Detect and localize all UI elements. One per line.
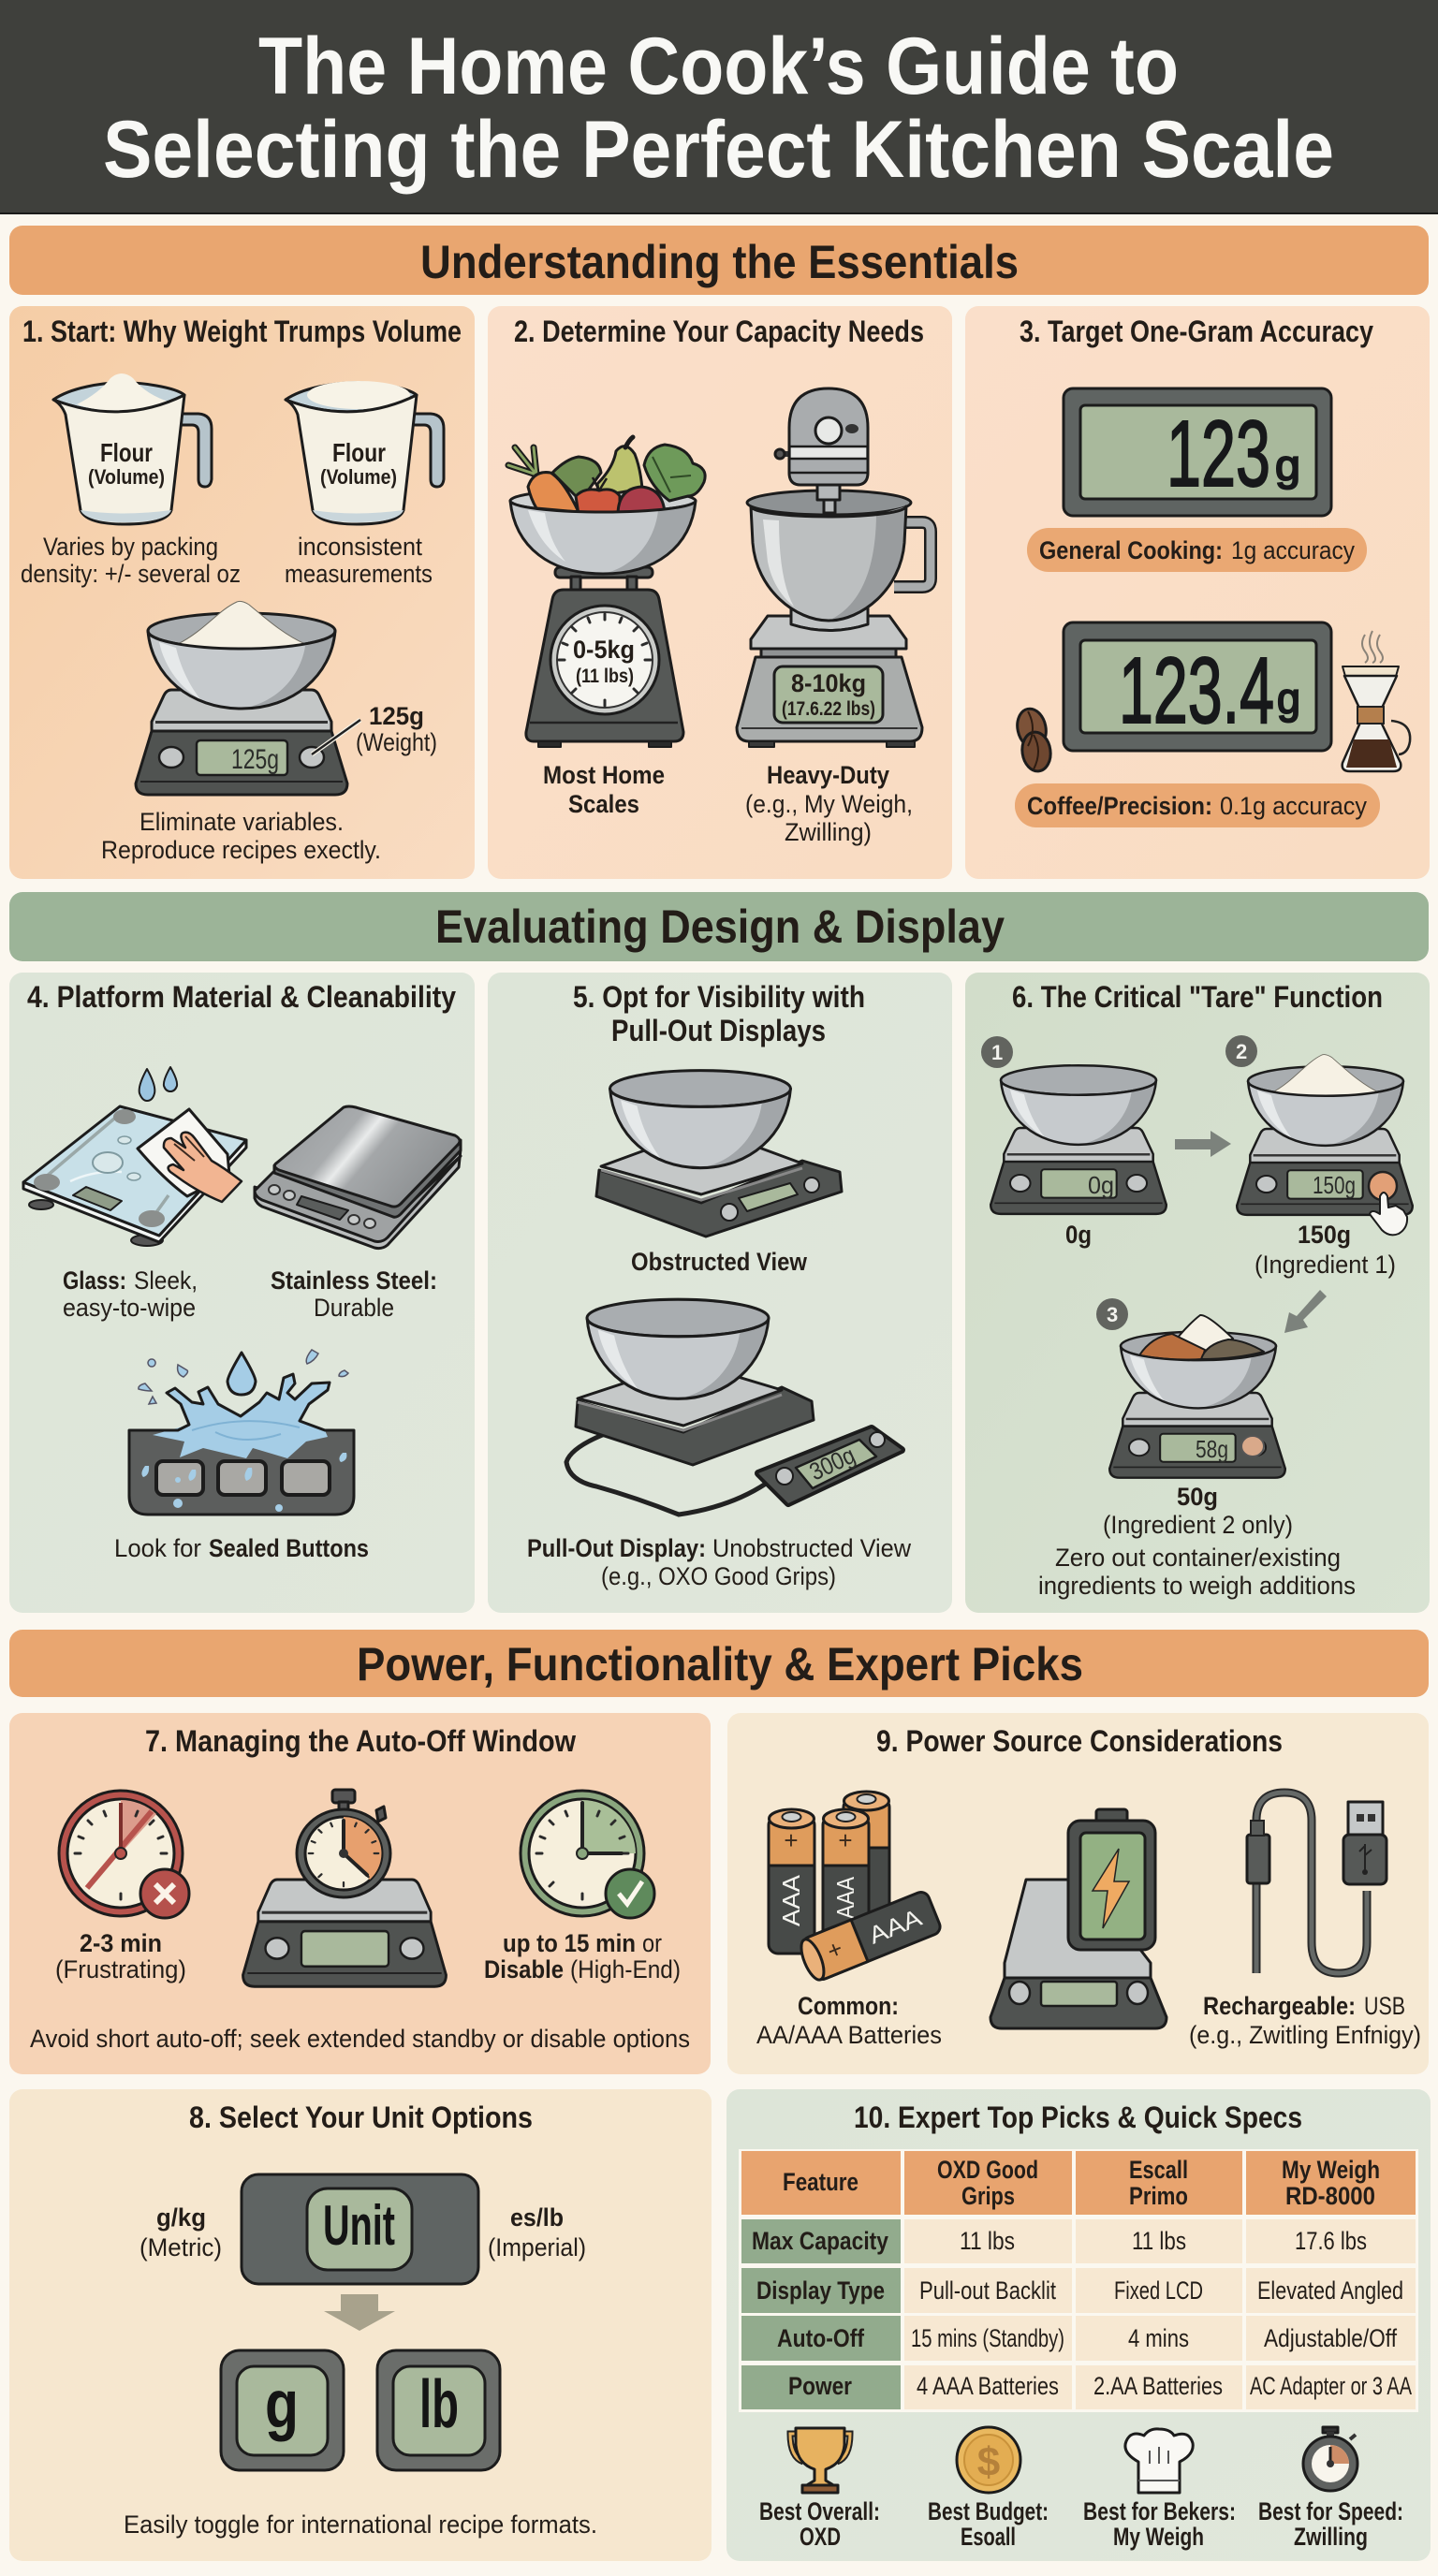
label: heavy duty xyxy=(745,761,913,846)
heading 5: 5. Opt for Visibility with xyxy=(573,980,865,1014)
icon: dial scale with vegetables: 0-5kg xyxy=(573,636,635,664)
icon: scale with pull-out display xyxy=(566,1299,902,1515)
caption: inconsistent xyxy=(285,533,433,588)
icon: measuring cup heaped: Flour xyxy=(100,438,153,467)
icon: stainless steel scale xyxy=(255,1106,461,1249)
heading 3: 3. Target One-Gram Accuracy xyxy=(1020,315,1373,348)
icon: g key: g xyxy=(265,2367,299,2442)
caption: stainless steel: Durable xyxy=(314,1294,394,1322)
icon: sealed buttons with water splash xyxy=(129,1350,354,1515)
caption: pull-out display: (e.g., OXO Good Grips) xyxy=(601,1562,836,1590)
icon: AAA batteries: + xyxy=(784,1826,799,1854)
section banner: understanding the essentials: Understanding the Essentials xyxy=(420,236,1019,288)
icon: stand mixer on heavy-duty scale xyxy=(737,388,931,747)
section banner: evaluating design and display xyxy=(9,892,1429,961)
arrow: down xyxy=(324,2294,395,2331)
title: The Home Cook’s Guide to xyxy=(258,22,1179,111)
icon: g key xyxy=(221,2350,344,2470)
panel 7: auto-off window xyxy=(9,1713,711,2074)
comparison table: Power xyxy=(788,2372,852,2400)
label: metric xyxy=(139,2203,222,2261)
caption: avoid short auto-off: Avoid short auto-off; seek extended standby or disable options xyxy=(30,2025,690,2053)
caption: packing density: density: +/- several oz xyxy=(21,560,241,588)
heading 7: 7. Managing the Auto-Off Window xyxy=(145,1724,576,1758)
icon: pour over coffee maker xyxy=(1343,631,1410,771)
heading 9: 9. Power Source Considerations xyxy=(876,1724,1283,1758)
step 2 scale: 150g xyxy=(1313,1171,1356,1199)
comparison table: Display Type xyxy=(756,2276,885,2305)
caption: inconsistent: inconsistent xyxy=(298,533,422,561)
icon: scale with pull-out display: 300g xyxy=(805,1441,859,1486)
heading 5 xyxy=(573,980,865,1047)
comparison table: 4 AAA Batteries xyxy=(917,2372,1059,2400)
comparison table: Feature xyxy=(783,2168,858,2196)
label: up to 15 min: up to 15 min xyxy=(503,1929,636,1957)
label: imperial: (Imperial) xyxy=(488,2233,586,2261)
caption: inconsistent: measurements xyxy=(285,560,433,588)
icon: AAA batteries: + xyxy=(823,1934,846,1966)
panel 4: platform material xyxy=(9,973,475,1613)
label: heavy duty: Zwilling) xyxy=(785,818,872,846)
caption: rechargeable xyxy=(1189,1992,1421,2049)
caption: best overall: OXD xyxy=(800,2523,841,2551)
caption: packing density xyxy=(21,533,241,588)
caption: eliminate variables: Eliminate variables. xyxy=(139,808,344,836)
caption: best for speed: Zwilling xyxy=(1294,2523,1368,2551)
heading 6: 6. The Critical "Tare" Function xyxy=(1012,980,1383,1014)
panel 6: tare function xyxy=(965,973,1430,1613)
label: 150g ingredient 1: 150g xyxy=(1298,1221,1351,1249)
heading 8: 8. Select Your Unit Options xyxy=(189,2100,533,2134)
caption: sealed buttons: Look for xyxy=(114,1534,201,1562)
panel 1: why weight trumps volume xyxy=(9,306,475,879)
icon: trophy xyxy=(790,2428,850,2493)
arrow: step 1 to 2 xyxy=(1175,1131,1231,1157)
step 2 scale: 2 xyxy=(1236,1040,1247,1063)
step 1 scale: 1 xyxy=(991,1041,1003,1064)
pill: general cooking: General Cooking: xyxy=(1039,536,1223,564)
caption: common batteries xyxy=(756,1992,942,2049)
caption: 50g and tare note: ingredients to weigh additions xyxy=(1038,1572,1356,1600)
caption: eliminate variables: Reproduce recipes exectly. xyxy=(101,836,381,864)
comparison table: 15 mins (Standby) xyxy=(911,2324,1064,2352)
caption: sealed buttons: Sealed Buttons xyxy=(209,1534,369,1562)
icon: AAA batteries: AAA xyxy=(831,1876,859,1919)
display: 123g xyxy=(1064,388,1331,516)
comparison table: Elevated Angled xyxy=(1257,2276,1403,2305)
caption: glass: easy-to-wipe xyxy=(63,1294,196,1322)
comparison table: Adjustable/Off xyxy=(1264,2324,1397,2352)
heading 1: 1. Start: Why Weight Trumps Volume xyxy=(22,315,462,348)
panel 9: power source xyxy=(727,1713,1429,2074)
label: up to 15 min: or xyxy=(642,1929,662,1957)
label: 2-3 min xyxy=(55,1929,186,1983)
section banner: power, functionality and expert picks xyxy=(9,1630,1429,1697)
heading 2: 2. Determine Your Capacity Needs xyxy=(514,315,924,348)
comparison table: Pull-out Backlit xyxy=(919,2276,1056,2305)
caption: best budget xyxy=(928,2497,1049,2551)
display: 123g: g xyxy=(1275,441,1300,490)
caption: best for bakers xyxy=(1083,2497,1236,2551)
label: most home scales: Most Home xyxy=(543,761,665,789)
caption: toggle: Easily toggle for international recipe formats. xyxy=(124,2510,597,2539)
panel 8: unit options xyxy=(9,2089,712,2561)
caption: best budget: Best Budget: xyxy=(928,2497,1049,2525)
caption: best for bakers: Best for Bekers: xyxy=(1083,2497,1236,2525)
comparison table: Fixed LCD xyxy=(1114,2276,1203,2305)
caption: best overall: Best Overall: xyxy=(759,2497,880,2525)
step 1 scale xyxy=(981,1036,1167,1214)
heading 4: 4. Platform Material & Cleanability xyxy=(27,980,456,1014)
panel 3: one gram accuracy xyxy=(965,306,1430,879)
label: 150g ingredient 1: (Ingredient 1) xyxy=(1255,1251,1396,1279)
comparison table: OXD Good xyxy=(937,2156,1038,2184)
icon: coin: $ xyxy=(977,2439,1000,2485)
label: 125g weight: (Weight) xyxy=(356,728,437,756)
comparison table: 11 lbs xyxy=(1132,2227,1186,2255)
label: heavy duty: (e.g., My Weigh, xyxy=(745,790,913,818)
label: 150g ingredient 1 xyxy=(1255,1221,1396,1279)
comparison table: Max Capacity xyxy=(752,2227,888,2255)
label: 125g weight xyxy=(356,702,437,756)
label: metric: g/kg xyxy=(156,2203,206,2232)
icon: chef hat xyxy=(1125,2429,1193,2493)
display: 123.4g xyxy=(1064,622,1331,751)
caption: sealed buttons xyxy=(114,1534,369,1562)
icon: extended auto-off clock xyxy=(521,1791,654,1918)
caption: stainless steel xyxy=(271,1266,437,1322)
caption: glass: Sleek, xyxy=(134,1266,198,1295)
icon: dial scale with vegetables: (11 lbs) xyxy=(576,666,634,687)
caption: best budget: Esoall xyxy=(961,2523,1016,2551)
label: up to 15 min xyxy=(484,1929,681,1983)
display: 123.4g: g xyxy=(1277,674,1300,723)
icon: stopwatch on scale xyxy=(243,1790,446,1986)
arrow: step 2 to 3 xyxy=(1284,1290,1327,1333)
caption: packing density: Varies by packing xyxy=(43,533,218,561)
section banner: evaluating design and display: Evaluating Design & Display xyxy=(435,900,1005,953)
caption: best for bakers: My Weigh xyxy=(1113,2523,1204,2551)
step 3 scale: 58g xyxy=(1196,1435,1228,1463)
icon: measuring cup level xyxy=(286,381,444,524)
icon: AAA batteries xyxy=(769,1792,943,1983)
comparison table: Escall xyxy=(1129,2156,1188,2184)
icon: measuring cup level: Flour xyxy=(332,438,386,467)
comparison table: 2.AA Batteries xyxy=(1093,2372,1223,2400)
caption: rechargeable: (e.g., Zwitling Enfnigy) xyxy=(1189,2021,1421,2049)
icon: glass scale being wiped xyxy=(23,1106,246,1246)
comparison table xyxy=(739,2149,1418,2412)
icon: lb key xyxy=(377,2350,500,2470)
caption: 50g and tare note: Zero out container/existing xyxy=(1055,1544,1341,1572)
label: 2-3 min: (Frustrating) xyxy=(55,1955,186,1983)
step 3 scale xyxy=(1096,1298,1285,1478)
pill: general cooking: 1g accuracy xyxy=(1231,536,1355,564)
label: 2-3 min: 2-3 min xyxy=(80,1929,162,1957)
caption: stainless steel: Stainless Steel: xyxy=(271,1266,437,1295)
comparison table: 4 mins xyxy=(1128,2324,1189,2352)
title banner xyxy=(0,0,1438,214)
display: 123g: 123 xyxy=(1167,402,1270,506)
label: 0g: 0g xyxy=(1065,1221,1092,1249)
caption: best for speed xyxy=(1258,2497,1403,2551)
label: imperial: es/lb xyxy=(510,2203,564,2232)
caption: common batteries: AA/AAA Batteries xyxy=(756,2021,942,2049)
label: 125g weight: 125g xyxy=(369,702,424,730)
icon: coffee beans xyxy=(1014,706,1053,773)
caption: glass xyxy=(63,1266,198,1322)
pill: coffee precision xyxy=(1015,783,1380,827)
caption: 50g and tare note xyxy=(1038,1483,1356,1600)
caption: glass: Glass: xyxy=(63,1266,126,1295)
icon: measuring cup level: (Volume) xyxy=(320,465,397,489)
label: up to 15 min: (High-End) xyxy=(570,1955,681,1983)
label: up to 15 min: Disable xyxy=(484,1955,564,1983)
section banner: power, functionality and expert picks: Power, Functionality & Expert Picks xyxy=(357,1638,1083,1690)
comparison table: RD-8000 xyxy=(1285,2182,1375,2210)
icon: timer xyxy=(1303,2427,1357,2491)
heading 10: 10. Expert Top Picks & Quick Specs xyxy=(854,2100,1302,2134)
heading 5: Pull-Out Displays xyxy=(611,1014,826,1047)
icon: scale with flour bowl xyxy=(136,601,360,795)
section banner: understanding the essentials xyxy=(9,226,1429,295)
label: heavy duty: Heavy-Duty xyxy=(767,761,889,789)
caption: pull-out display xyxy=(527,1534,911,1590)
comparison table: Grips xyxy=(961,2182,1015,2210)
step 1 scale: 0g xyxy=(1088,1171,1114,1199)
icon: AAA batteries: AAA xyxy=(865,1903,926,1950)
caption: obstructed view: Obstructed View xyxy=(631,1248,808,1276)
comparison table: Auto-Off xyxy=(777,2324,865,2352)
caption: rechargeable: USB xyxy=(1364,1992,1405,2020)
icon: stand mixer on heavy-duty scale: 8-10kg xyxy=(791,669,866,697)
comparison table: My Weigh xyxy=(1282,2156,1380,2184)
panel 5: pull-out displays xyxy=(488,973,952,1613)
icon: scale with bowl obstructing display xyxy=(596,1071,842,1237)
label: metric: (Metric) xyxy=(139,2233,222,2261)
panel 2: capacity needs xyxy=(488,306,952,879)
icon: AAA batteries: AAA xyxy=(777,1874,805,1926)
step 3 scale: 3 xyxy=(1107,1303,1118,1326)
title: Selecting the Perfect Kitchen Scale xyxy=(103,105,1334,195)
icon: measuring cup heaped xyxy=(53,373,212,524)
pill: general cooking xyxy=(1027,528,1367,572)
label: imperial xyxy=(488,2203,586,2261)
caption: 50g and tare note: 50g xyxy=(1177,1483,1218,1511)
icon: short auto-off clock xyxy=(59,1791,189,1918)
caption: rechargeable: Rechargeable: xyxy=(1203,1992,1356,2020)
icon: stand mixer on heavy-duty scale: (17.6.22 lbs) xyxy=(782,698,875,720)
display: 123.4g: 123.4 xyxy=(1119,638,1274,743)
caption: pull-out display: Unobstructed View xyxy=(712,1534,911,1562)
panel 10: expert top picks xyxy=(726,2089,1431,2561)
comparison table: 11 lbs xyxy=(960,2227,1015,2255)
label: most home scales xyxy=(543,761,665,818)
icon: AAA batteries: + xyxy=(838,1826,853,1854)
comparison table: 17.6 lbs xyxy=(1295,2227,1367,2255)
icon: coin xyxy=(957,2427,1020,2493)
label: most home scales: Scales xyxy=(568,790,639,818)
pill: coffee precision: 0.1g accuracy xyxy=(1220,792,1367,820)
icon: USB cable xyxy=(1247,1793,1387,1973)
icon: unit button xyxy=(242,2174,478,2284)
pill: coffee precision: Coffee/Precision: xyxy=(1027,792,1212,820)
title xyxy=(103,22,1334,195)
comparison table: Primo xyxy=(1129,2182,1188,2210)
icon: measuring cup heaped: (Volume) xyxy=(88,465,165,489)
caption: pull-out display: Pull-Out Display: xyxy=(527,1534,706,1562)
caption: best overall xyxy=(759,2497,880,2551)
icon: water drops xyxy=(139,1067,177,1101)
caption: 50g and tare note: (Ingredient 2 only) xyxy=(1103,1511,1293,1539)
icon: scale with flour bowl: 125g xyxy=(231,744,279,775)
icon: lb key: lb xyxy=(419,2367,459,2442)
icon: unit button: Unit xyxy=(323,2194,395,2257)
caption: common batteries: Common: xyxy=(798,1992,899,2020)
icon: scale with rechargeable battery xyxy=(990,1809,1167,2028)
icon: dial scale with vegetables xyxy=(508,437,705,747)
caption: eliminate variables xyxy=(101,808,381,864)
step 2 scale xyxy=(1225,1035,1413,1235)
